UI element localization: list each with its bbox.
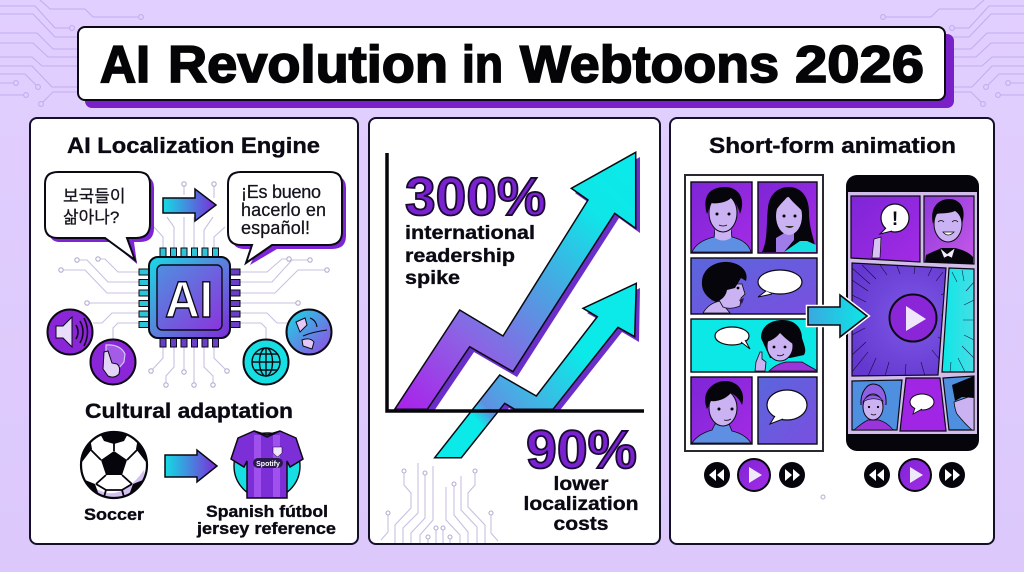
comic page: [685, 175, 823, 451]
text: international readership spike: international: [405, 222, 535, 244]
title: AI: [100, 36, 150, 94]
circuit traces around chip: [59, 182, 329, 387]
icon: globe: [244, 340, 288, 384]
small circuit node: [821, 495, 825, 499]
title: in: [462, 36, 503, 94]
heading: Short-form animation: Short-form animation: [709, 133, 956, 158]
phone panel: exclamation: [851, 196, 920, 262]
text: lower localization costs: lower: [554, 473, 609, 495]
comic panel: boy bottom: [691, 377, 752, 444]
arrow: comic to video: [808, 295, 867, 337]
text: international readership spike: [405, 222, 535, 289]
comic panel: boy talking with bubble: [691, 258, 817, 314]
text: lower localization costs: localization: [524, 493, 638, 515]
phone panel: smiling man: [924, 196, 974, 264]
arrow: upper growth arrow: [395, 152, 640, 414]
stat: 90%: 90%: [526, 420, 637, 480]
icon: gesture translation: [286, 310, 332, 354]
speech bubble: Korean: 보국들이: [63, 187, 126, 206]
panel: growth chart: [369, 118, 660, 544]
speech bubble: Spanish: hacerlo en: [241, 200, 326, 220]
stat: 300%: 300%: [405, 167, 546, 227]
label: Spanish fútbol jersey reference: Spanish fútbol: [206, 503, 328, 521]
text: lower localization costs: [524, 473, 638, 535]
controls: comic page: [704, 459, 805, 491]
text: lower localization costs: costs: [554, 513, 609, 535]
comic panel: woman long hair: [758, 182, 817, 253]
icon: AI chip: [139, 248, 240, 347]
title: 2026: [795, 36, 924, 94]
panel: short-form animation: [670, 118, 994, 544]
arrow: lower growth arrow: [435, 283, 640, 462]
speech bubble: Spanish: ¡Es bueno: [241, 182, 321, 202]
circuit decoration: top left: [0, 0, 143, 106]
comic panel: boy smiling: [691, 182, 752, 253]
speech bubble: Spanish: [228, 172, 346, 265]
arrow: translate: [163, 189, 216, 221]
circuit traces: [381, 463, 498, 543]
icon: speaker: [48, 310, 92, 354]
speech bubble: Spanish: español!: [241, 218, 310, 238]
phone panel: exclamation: !: [892, 209, 898, 230]
icon: AI chip: AI: [165, 271, 213, 328]
chart axes: [387, 153, 644, 411]
title: Webtoons: [520, 36, 779, 94]
speech bubble: Korean: [45, 172, 154, 264]
heading: AI Localization Engine: AI Localization Engine: [67, 133, 320, 158]
phone panel: play burst: [852, 263, 947, 376]
text: international readership spike: spike: [405, 267, 460, 289]
icon: hand and face: [90, 340, 136, 384]
speech bubble: Korean: 삶아나?: [63, 208, 119, 227]
arrow: soccer to jersey: [165, 450, 217, 482]
icon: soccer ball: [80, 430, 148, 500]
panel: AI localization engine: [30, 118, 358, 544]
title: Revolution: [168, 36, 448, 94]
phone: [846, 175, 979, 451]
comic panel: woman with bubble on teal: [691, 319, 817, 372]
icon: football jersey: [231, 431, 303, 499]
phone panel: woman: [852, 380, 902, 430]
controls: phone: [864, 459, 965, 491]
phone panel: teal burst: [942, 268, 974, 372]
phone panel: profile: [943, 376, 974, 430]
heading: Cultural adaptation: Cultural adaptation: [85, 400, 293, 423]
title: [100, 36, 924, 94]
label: jersey reference line two: jersey reference: [196, 520, 336, 538]
text: international readership spike: readership: [405, 245, 515, 267]
phone panel: small bubble: [900, 378, 946, 431]
title banner: [78, 27, 954, 108]
comic panel: blank speech bubble: [758, 377, 817, 444]
circuit decoration: top right: [881, 0, 1024, 106]
label: Soccer: Soccer: [84, 506, 145, 524]
icon: football jersey: Spotify: [256, 461, 280, 468]
